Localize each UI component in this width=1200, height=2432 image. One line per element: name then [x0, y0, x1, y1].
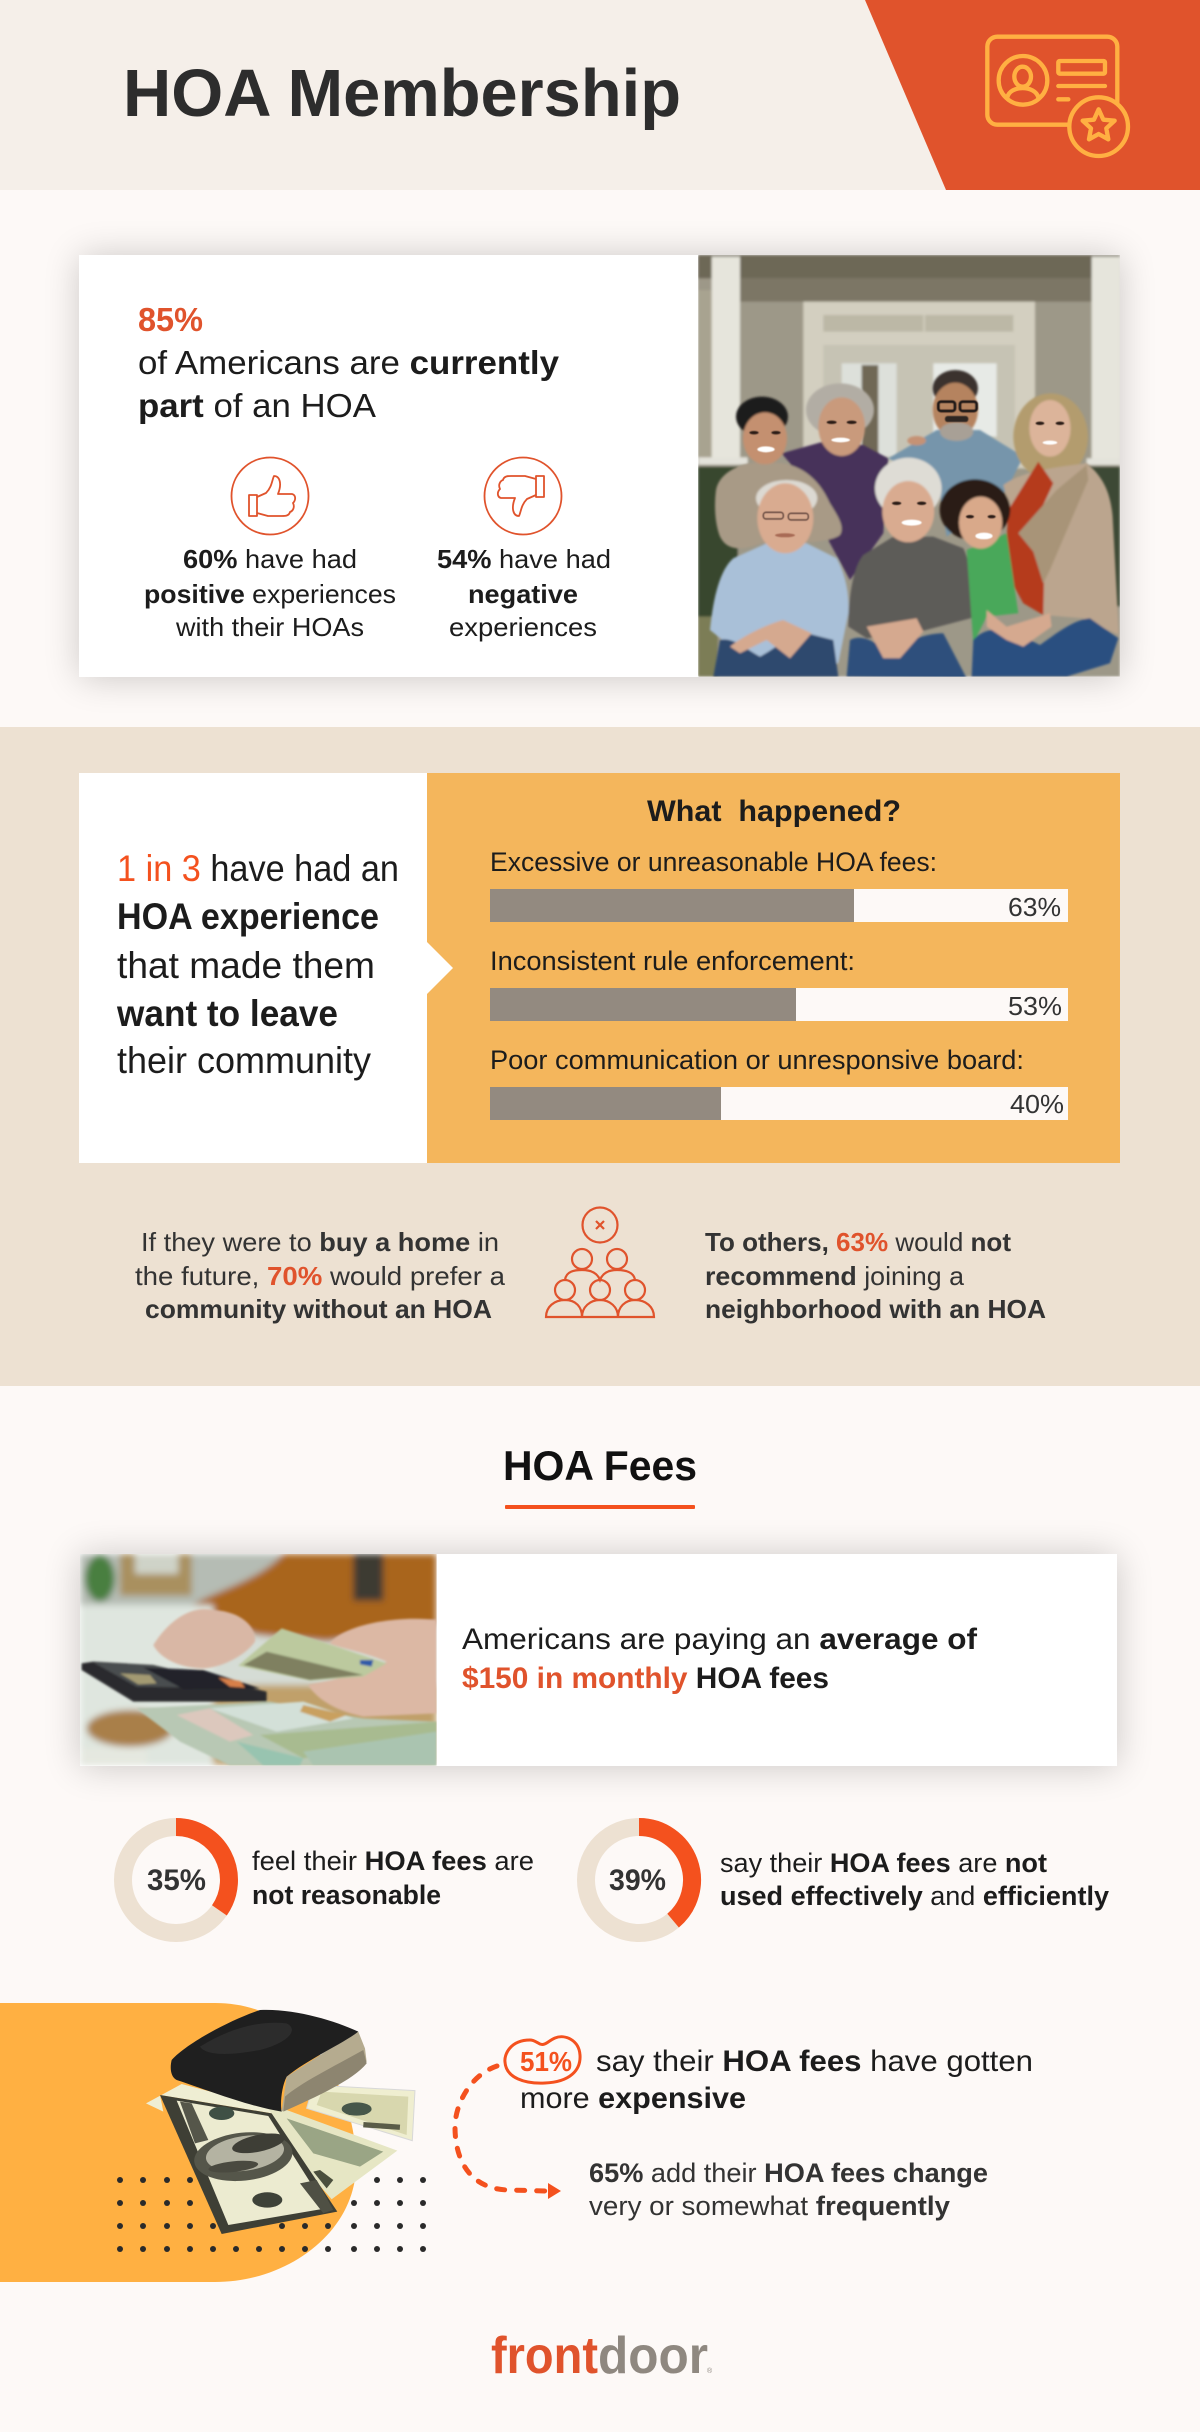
text: currently part of an HOA: of Americans are currently [138, 344, 560, 381]
text: would not recommend: neighborhood with an HOA [705, 1294, 1046, 1324]
text: would not recommend: To others, 63% would not [705, 1227, 1011, 1257]
section: leaving experience [0, 727, 1200, 1386]
donut chart: 35%: 35% [147, 1864, 206, 1897]
text: negative experiences: 54% have had [437, 544, 611, 574]
title: HOA Membership [123, 56, 681, 131]
text: 65% fee changes: very or somewhat frequently [589, 2191, 950, 2221]
callout: scribble circle around 51% [505, 2037, 580, 2083]
bar: excessive fees 63% [490, 847, 1068, 922]
text: negative experiences: experiences [449, 612, 597, 642]
bar: poor communication 40%: 40% [1010, 1089, 1064, 1119]
photo: family in front of house [698, 255, 1120, 678]
icon: group of people with x [546, 1208, 654, 1317]
text: 51% more expensive: more expensive [520, 2082, 746, 2115]
bar: poor communication 40%: Poor communication or unresponsive board: [490, 1045, 1024, 1075]
text: positive experiences [144, 544, 396, 642]
text: negative experiences: negative [468, 579, 578, 609]
text: fees not reasonable: feel their HOA fees are [252, 1846, 534, 1876]
text: average of $150 [462, 1623, 978, 1695]
heading: HOA Fees [503, 1442, 697, 1509]
heading: HOA Fees: HOA Fees [503, 1442, 697, 1489]
text: 51% more expensive: say their HOA fees have gotten [596, 2045, 1033, 2078]
text: positive experiences: 60% have had [183, 544, 357, 574]
text: would not recommend: recommend joining a [705, 1261, 965, 1291]
icon: thumbs up [232, 458, 308, 534]
icon: membership card with star [987, 37, 1128, 156]
bar: excessive fees 63%: 63% [1008, 892, 1061, 922]
callout: scribble circle around 51%: 51% [520, 2046, 572, 2077]
donut chart: 39%: 39% [609, 1864, 666, 1897]
chart heading: What happened? [647, 795, 901, 828]
wallet graphic [0, 2003, 426, 2282]
panel: 1 in 3 statement: their community [117, 1040, 371, 1081]
panel: 1 in 3 statement: that made them [117, 945, 375, 986]
panel: current membership [79, 255, 1120, 678]
panel: 1 in 3 statement [79, 773, 428, 1163]
text: average of $150: Americans are paying an average of [462, 1623, 978, 1656]
text: positive experiences: positive experiences [144, 579, 396, 609]
logo: frontdoor: door [598, 2327, 708, 2385]
photo: hands counting money with calculator [80, 1554, 437, 1766]
text: fees not used effectively: used effectively and efficiently [720, 1881, 1109, 1911]
bar: excessive fees 63%: Excessive or unreasonable HOA fees: [490, 847, 937, 877]
header band [0, 0, 1200, 190]
bar: inconsistent enforcement 53% [490, 946, 1068, 1021]
text: fees not reasonable: not reasonable [252, 1880, 441, 1910]
panel: 1 in 3 statement: want to leave [116, 993, 338, 1034]
text: 65% fee changes: 65% add their HOA fees change [589, 2158, 988, 2188]
logo: frontdoor: front [491, 2327, 598, 2385]
faces [749, 421, 1064, 518]
panel: what happened chart [427, 773, 1120, 1163]
arrow: dashed curve [455, 2066, 561, 2199]
text: prefer no HOA: community without an HOA [145, 1294, 492, 1324]
text: prefer no HOA: the future, 70% would prefer a [135, 1261, 506, 1291]
bar: inconsistent enforcement 53%: Inconsistent rule enforcement: [490, 946, 855, 976]
text: negative experiences [437, 544, 611, 642]
text: fees not reasonable [252, 1846, 534, 1910]
front row [710, 543, 849, 670]
logo: frontdoor: ® [707, 2367, 713, 2375]
bar: poor communication 40% [490, 1045, 1068, 1120]
back row [782, 442, 888, 580]
text: positive experiences: with their HOAs [175, 612, 364, 642]
text: fees not used effectively [720, 1848, 1109, 1911]
text: currently part of an HOA: part of an HOA [138, 387, 376, 424]
panel: 1 in 3 statement: HOA experience [117, 896, 379, 937]
donut chart: 39% [586, 1827, 692, 1933]
text: fees not used effectively: say their HOA fees are not [720, 1848, 1047, 1878]
panel: average monthly fees [80, 1554, 1117, 1767]
text: would not recommend [705, 1227, 1046, 1324]
text: 65% fee changes [589, 2158, 988, 2221]
text: 51% more expensive [505, 2037, 1033, 2115]
text: prefer no HOA: If they were to buy a home in [141, 1227, 499, 1257]
stat: 85 percent: 85% [138, 301, 203, 338]
logo: frontdoor [491, 2327, 713, 2385]
image: wallet and dollar bills [146, 2010, 415, 2234]
donut chart: 35% [123, 1827, 229, 1933]
text: average of $150: $150 in monthly HOA fees [462, 1662, 829, 1695]
icon: thumbs down [484, 458, 562, 534]
bar: inconsistent enforcement 53%: 53% [1008, 991, 1062, 1021]
dot pattern [117, 2177, 426, 2252]
text: currently part of an HOA [138, 344, 560, 424]
panel: 1 in 3 statement: 1 in 3 have had an [117, 848, 399, 889]
text: prefer no HOA [135, 1227, 506, 1324]
